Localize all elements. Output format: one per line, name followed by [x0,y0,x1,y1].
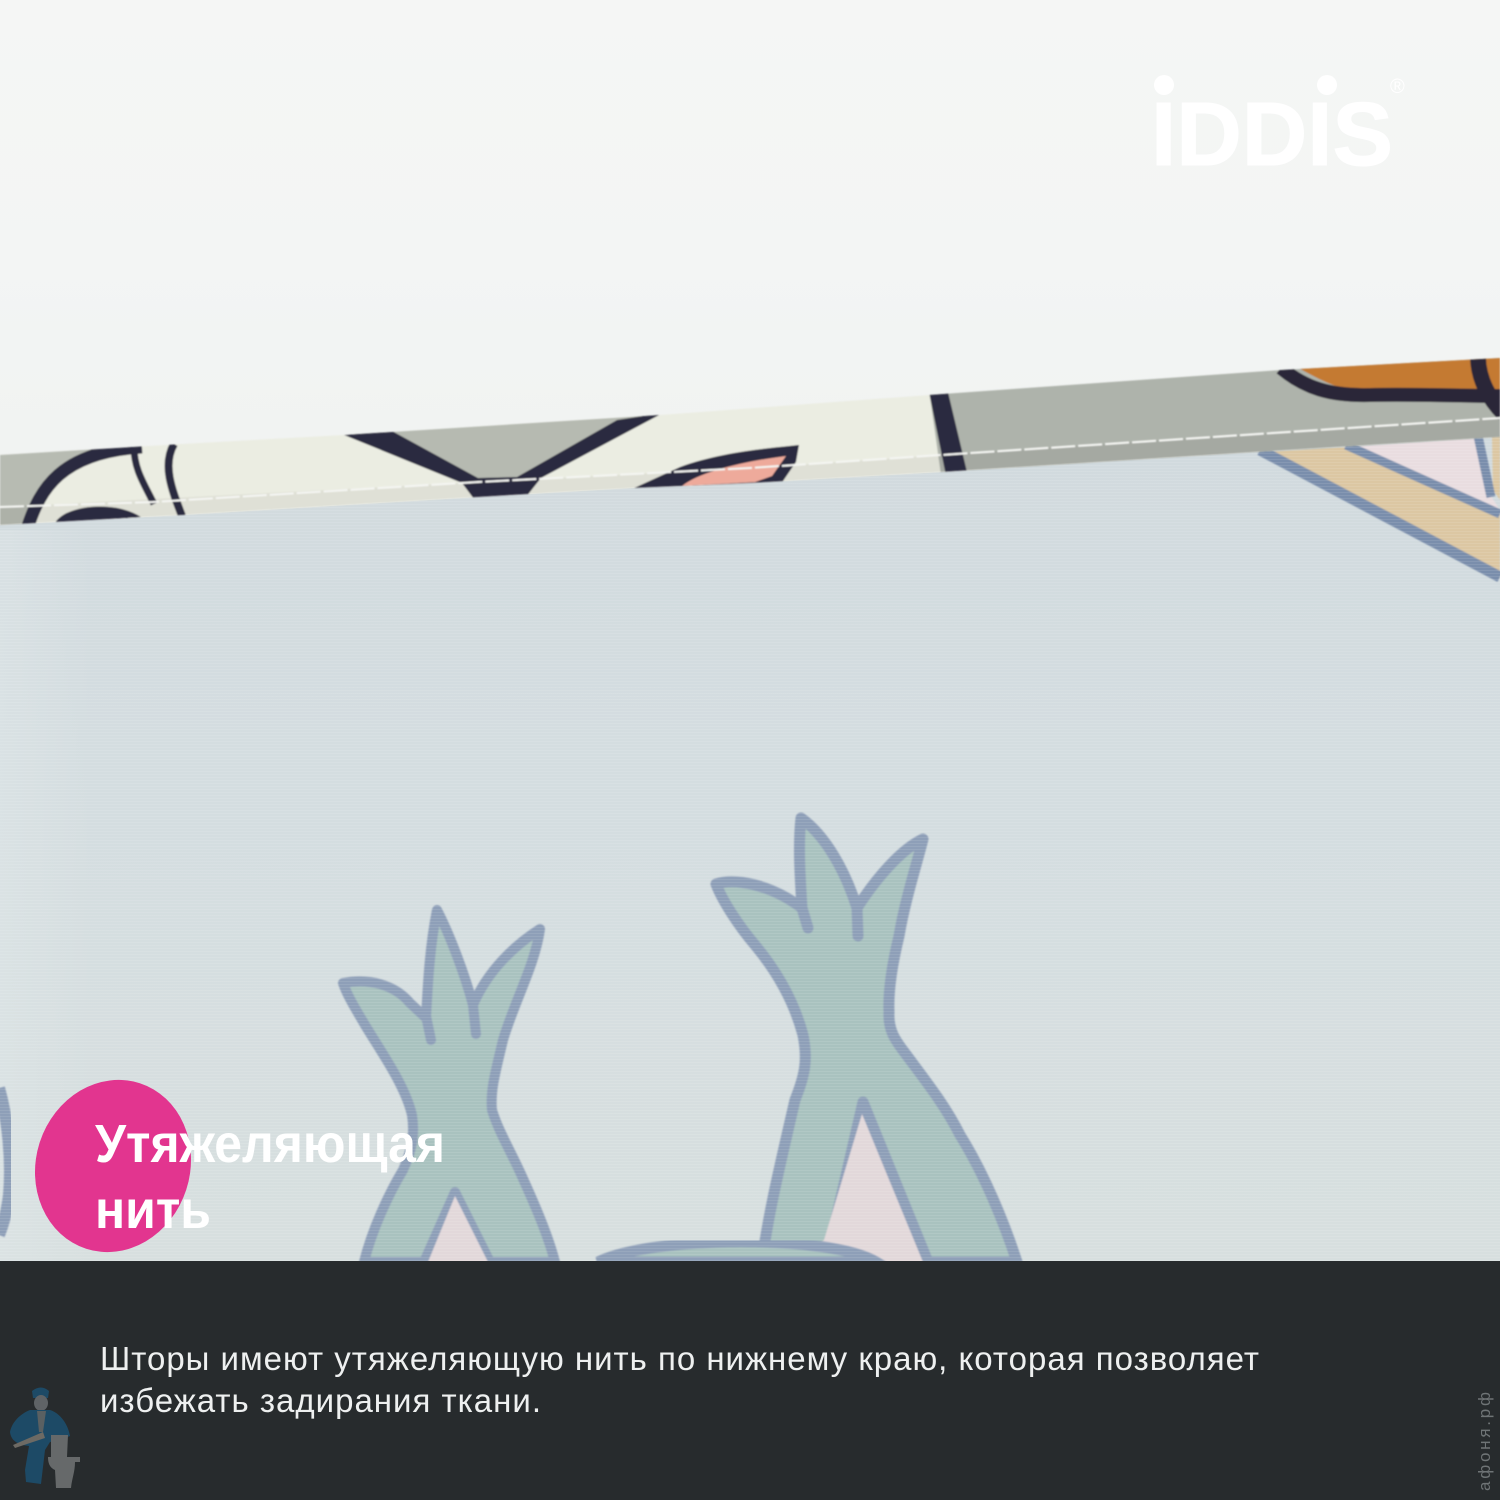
hem: white seam stitching [0,418,1500,507]
watermark: site name: афоня.рф [1475,1392,1494,1491]
logo dot: second i [1317,75,1337,95]
hem: orange section [1300,357,1500,390]
badge: pink blob [13,1059,213,1273]
onion flesh: right [800,1114,923,1262]
hem: pink ear [632,445,799,489]
logo: IDDIS: IDDIS [1151,85,1393,185]
illustration: left edge onion [0,1088,10,1235]
illustration: right onion sprouts [716,818,1017,1262]
hem: dark thin strokes [134,447,154,504]
heading: weighted thread: нить [95,1180,211,1240]
hem: lower shaded strip [0,418,1500,525]
hem: dark vertical right [1478,356,1500,414]
hem: dark curve right [1281,368,1500,396]
text block: description [100,1340,1259,1419]
panel: curtain fabric [0,437,1500,1261]
panel: dark footer bar [0,1261,1500,1500]
logo: registered mark: ® [1390,76,1405,98]
texture: fabric weave [0,437,1500,1261]
background: white wall [0,0,1500,520]
heading: weighted thread: Утяжеляющая [95,1114,445,1174]
text block: description: Шторы имеют утяжеляющую нить по нижнему краю, которая позволяет [100,1340,1259,1377]
illustration: left onion sprouts [343,910,555,1262]
hem: grey section left [0,449,91,526]
onion inner spur: left leaf [426,1005,476,1040]
hem: dark lower arc [55,507,141,523]
onion flesh: left [428,1196,488,1262]
hem: dark V shape [344,413,663,499]
logo dot: first i [1154,75,1174,95]
icon: plumber with toilet watermark [10,1388,80,1488]
hem: grey section right [930,368,1500,472]
hem: dark vertical centre [929,392,968,476]
illustration: onion bulb dome [598,1242,876,1262]
illustration: onion top-right on fabric [1260,436,1500,578]
hem: grey V section [394,416,642,479]
hem: dark left arc [28,447,142,526]
hem: folded curtain edge [0,350,1500,530]
text block: description: избежать задирания ткани. [100,1382,541,1419]
heading: weighted thread [95,1114,445,1240]
onion inner spur: right leaves [802,908,858,936]
